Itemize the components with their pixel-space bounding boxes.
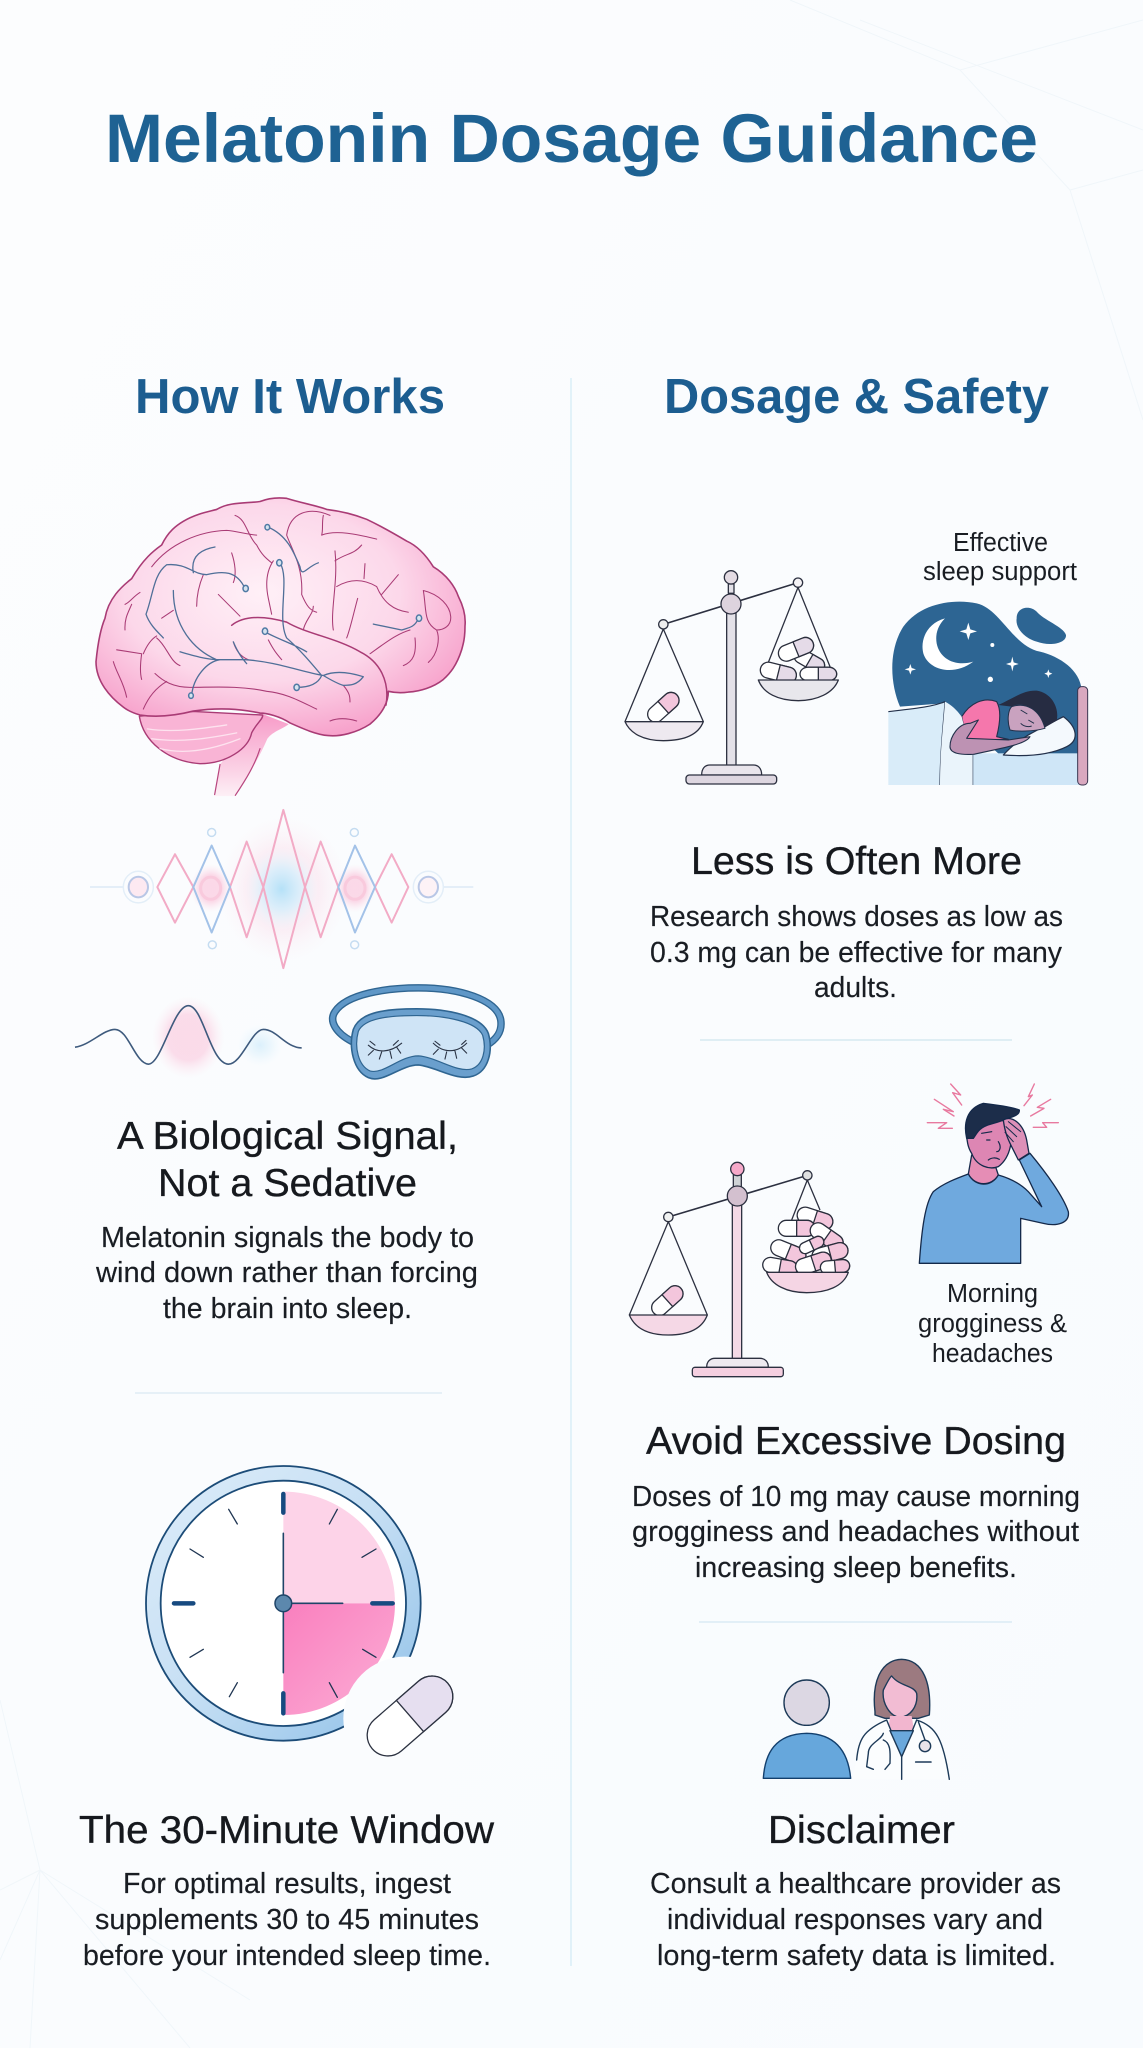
text block: less is often more — [650, 840, 1063, 1004]
text block: a biological signal: wind down rather than forcing — [95, 1257, 478, 1289]
icon: patient and doctor — [763, 1659, 949, 1779]
text block: disclaimer — [650, 1809, 1061, 1972]
text block: the 30-minute window: before your intended sleep time. — [83, 1940, 491, 1972]
text block: the 30-minute window: For optimal results, ingest — [123, 1868, 451, 1900]
capsule: single — [648, 1282, 686, 1319]
text block: the 30-minute window: supplements 30 to 45 minutes — [95, 1904, 479, 1936]
label: morning grogginess and headaches: grogginess & — [918, 1310, 1067, 1338]
text block: a biological signal: Not a Sedative — [158, 1162, 417, 1205]
text block: avoid excessive dosing — [632, 1420, 1080, 1584]
text block: avoid excessive dosing: grogginess and headaches without — [632, 1516, 1079, 1548]
text block: a biological signal: the brain into sleep. — [163, 1293, 412, 1325]
title: Melatonin Dosage Guidance — [105, 100, 1038, 177]
capsules: large pile — [762, 1205, 850, 1277]
icon: signal waveform — [90, 810, 473, 968]
label: effective sleep support: sleep support — [923, 558, 1077, 586]
label: effective sleep support: Effective — [953, 529, 1048, 557]
text block: a biological signal — [95, 1115, 478, 1325]
label: morning grogginess and headaches — [918, 1280, 1067, 1368]
icon: man with headache — [919, 1084, 1068, 1263]
label: morning grogginess and headaches: headaches — [932, 1340, 1053, 1368]
icon: tipped scale with many capsules — [629, 1162, 850, 1377]
text block: avoid excessive dosing: Doses of 10 mg may cause morning — [632, 1481, 1080, 1513]
text block: disclaimer: individual responses vary and — [667, 1904, 1043, 1936]
text block: less is often more: Research shows doses as low as — [650, 901, 1063, 933]
text block: less is often more: 0.3 mg can be effective for many — [650, 937, 1063, 969]
text block: the 30-minute window — [79, 1809, 495, 1972]
text block: disclaimer: Consult a healthcare provider as — [650, 1868, 1061, 1900]
icon: brain — [96, 498, 465, 796]
heading: how it works: How It Works — [135, 370, 445, 424]
label: effective sleep support — [923, 529, 1077, 586]
icon: small sleep wave — [75, 996, 302, 1079]
capsule — [359, 1668, 461, 1764]
text block: less is often more: Less is Often More — [691, 840, 1022, 883]
icon: sleep mask — [333, 988, 501, 1079]
text block: the 30-minute window: The 30-Minute Window — [79, 1809, 495, 1852]
text block: a biological signal: A Biological Signal, — [117, 1115, 458, 1158]
panel: dosage and safety — [625, 370, 1088, 1972]
icon: balanced scale with small dose — [625, 571, 838, 784]
text block: less is often more: adults. — [814, 972, 897, 1004]
icon: person sleeping under night sky — [888, 602, 1088, 785]
text block: avoid excessive dosing: increasing sleep benefits. — [695, 1552, 1017, 1584]
label: morning grogginess and headaches: Morning — [947, 1280, 1038, 1308]
text block: a biological signal: Melatonin signals the body to — [101, 1222, 474, 1254]
text block: avoid excessive dosing: Avoid Excessive Dosing — [646, 1420, 1066, 1463]
text block: disclaimer: Disclaimer — [768, 1809, 955, 1852]
icon: clock with capsule — [146, 1466, 467, 1780]
capsule: single — [644, 689, 682, 726]
heading: dosage and safety: Dosage & Safety — [664, 370, 1049, 424]
capsules: dose pile — [759, 635, 837, 685]
panel: how it works — [75, 370, 501, 1972]
text block: disclaimer: long-term safety data is limited. — [657, 1940, 1056, 1972]
